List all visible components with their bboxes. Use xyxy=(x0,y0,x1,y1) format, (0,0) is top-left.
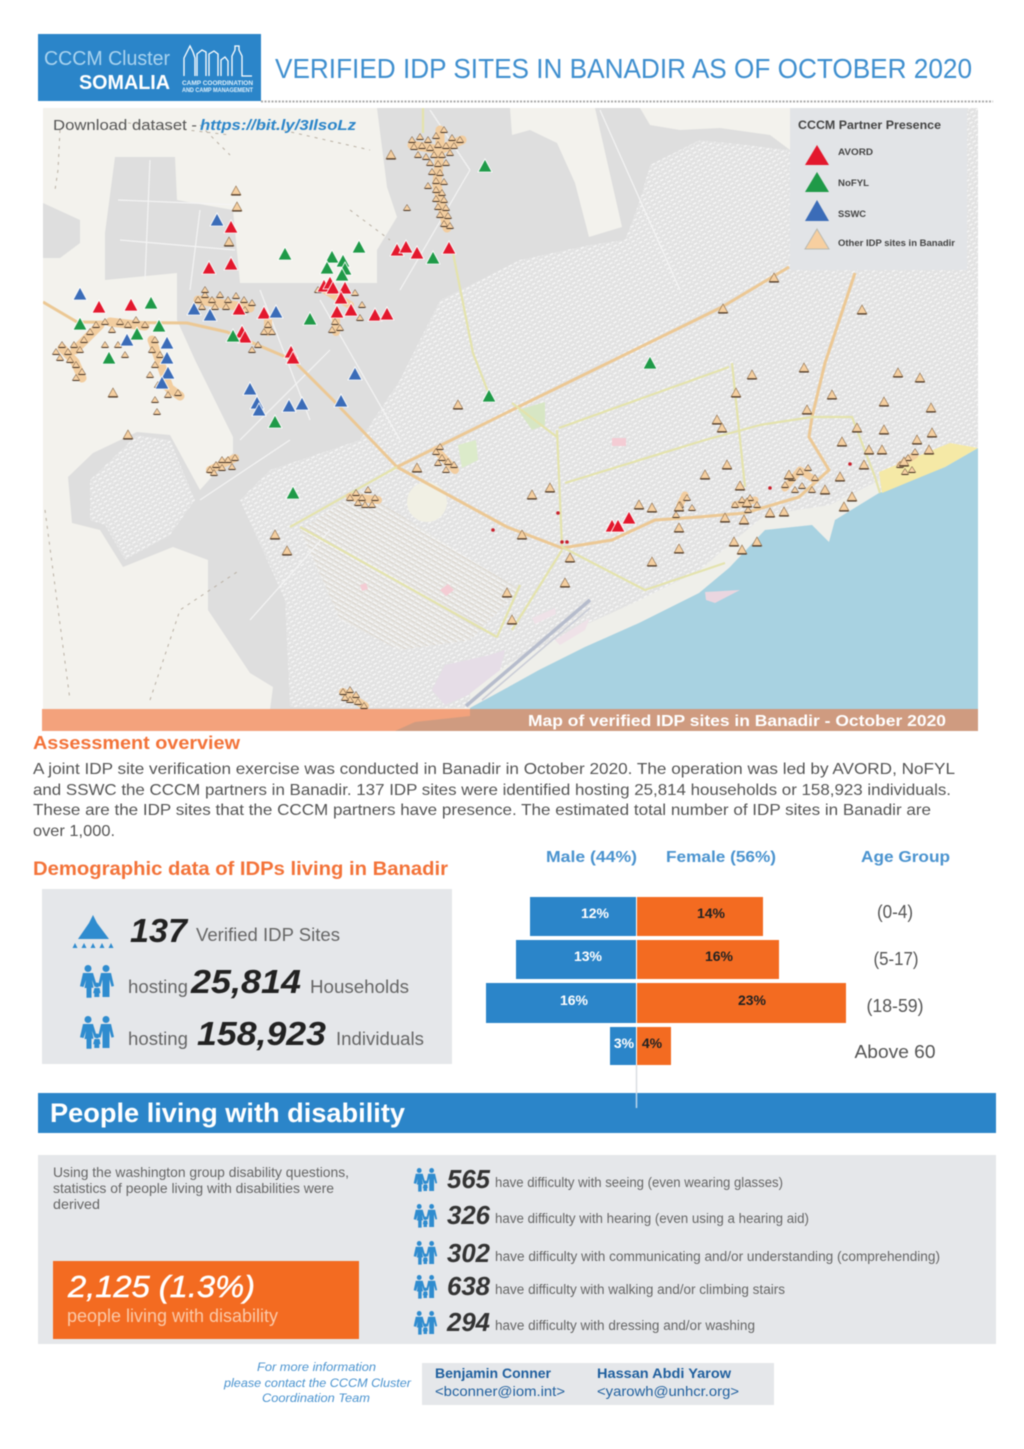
map caption bar: Map of verified IDP sites in Banadir - October 2020 xyxy=(528,713,946,730)
roads xyxy=(43,108,880,637)
intro text xyxy=(53,1164,349,1212)
map legend: CCCM partner presence: SSWC xyxy=(838,209,867,219)
contacts panel: Benjamin Conner xyxy=(435,1365,552,1381)
panel: key figures: hosting xyxy=(128,977,188,997)
footer note: please contact the CCCM Cluster xyxy=(223,1376,412,1390)
panel: key figures: Households xyxy=(310,977,409,997)
population pyramid chart: 16% xyxy=(705,948,734,964)
row: dressing: have difficulty with dressing and/or washing xyxy=(495,1318,755,1333)
row: seeing: have difficulty with seeing (even wearing glasses) xyxy=(495,1175,783,1190)
banner: people living with disability xyxy=(38,1093,996,1133)
map of verified IDP sites xyxy=(43,108,980,712)
map legend: CCCM partner presence: NoFYL xyxy=(838,178,870,188)
download dataset link: Download dataset - xyxy=(53,117,197,134)
population pyramid chart xyxy=(486,849,950,1108)
population pyramid chart: Male (44%) xyxy=(546,849,637,866)
row: seeing xyxy=(414,1164,783,1194)
population pyramid chart: Female (56%) xyxy=(666,849,776,866)
map caption bar xyxy=(42,709,978,731)
callout: total people with disability xyxy=(53,1261,359,1339)
population pyramid chart: (0-4) xyxy=(877,902,913,922)
footer note: Coordination Team xyxy=(262,1391,370,1405)
header logo: CCCM Cluster Somalia: CAMP COORDINATION xyxy=(182,81,253,87)
assessment overview paragraph: These are the IDP sites that the CCCM partners have presence. The estimated total number of IDP sites in Banadir are xyxy=(33,802,931,819)
population pyramid chart: Above 60 xyxy=(854,1042,936,1062)
row: communicating xyxy=(414,1238,940,1268)
contacts panel: <yarowh@unhcr.org> xyxy=(597,1383,739,1399)
icon: tent xyxy=(72,915,114,948)
row: walking xyxy=(414,1271,785,1301)
heading: demographic data: Demographic data of IDPs living in Banadir xyxy=(33,859,449,880)
header logo: CCCM Cluster Somalia: AND CAMP MANAGEMENT xyxy=(182,88,253,94)
download dataset link xyxy=(53,117,357,134)
callout: total people with disability: people living with disability xyxy=(67,1306,278,1326)
population pyramid chart: (5-17) xyxy=(874,949,918,969)
panel: disability statistics xyxy=(38,1155,996,1344)
heading: assessment overview: Assessment overview xyxy=(33,732,241,753)
panel: key figures: Individuals xyxy=(336,1029,424,1049)
intro text: Using the washington group disability questions, xyxy=(53,1164,349,1180)
row: hearing: have difficulty with hearing (even using a hearing aid) xyxy=(495,1211,809,1226)
title: VERIFIED IDP SITES IN BANADIR AS OF OCTOBER 2020 xyxy=(275,53,972,84)
icon: family xyxy=(80,1016,114,1049)
panel: key figures: 158,923 xyxy=(197,1015,326,1052)
row: communicating: have difficulty with communicating and/or understanding (comprehending) xyxy=(495,1249,940,1264)
population pyramid chart: 3% xyxy=(614,1035,635,1051)
map legend: CCCM partner presence: CCCM Partner Presence xyxy=(798,120,941,132)
population pyramid chart: Age Group xyxy=(861,849,950,866)
contacts panel xyxy=(422,1363,774,1405)
population pyramid chart: 12% xyxy=(581,905,610,921)
row: dressing xyxy=(414,1307,755,1337)
icon: family xyxy=(80,965,114,998)
callout: total people with disability: 2,125 (1.3%) xyxy=(67,1269,255,1304)
row: seeing: 565 xyxy=(447,1164,491,1194)
population pyramid chart: (18-59) xyxy=(866,996,924,1016)
map legend: CCCM partner presence xyxy=(790,108,967,270)
assessment overview paragraph xyxy=(33,761,955,840)
header logo: CCCM Cluster Somalia xyxy=(38,34,261,101)
row: walking: 638 xyxy=(447,1271,491,1301)
panel: key figures xyxy=(42,889,452,1064)
intro text: derived xyxy=(53,1196,100,1212)
population pyramid chart: 4% xyxy=(642,1035,663,1051)
map legend: CCCM partner presence: Other IDP sites in Banadir xyxy=(838,238,956,248)
population pyramid chart: 23% xyxy=(738,992,767,1008)
coastal strip xyxy=(470,480,880,708)
SSWC markers xyxy=(73,213,362,416)
IDP site clusters xyxy=(52,126,919,709)
header logo: CCCM Cluster Somalia: SOMALIA xyxy=(79,72,170,94)
map legend: CCCM partner presence: AVORD xyxy=(838,147,874,157)
row: hearing: 326 xyxy=(447,1200,491,1230)
population pyramid chart: 14% xyxy=(697,905,726,921)
panel: key figures: hosting xyxy=(128,1029,188,1049)
assessment overview paragraph: over 1,000. xyxy=(33,823,115,840)
assessment overview paragraph: A joint IDP site verification exercise was conducted in Banadir in October 2020. The operation was led by AVORD, NoFYL xyxy=(33,761,955,778)
contacts panel: Hassan Abdi Yarow xyxy=(597,1365,731,1381)
row: communicating: 302 xyxy=(447,1238,491,1268)
intro text: statistics of people living with disabilities were xyxy=(53,1180,334,1196)
banner: people living with disability: People living with disability xyxy=(50,1098,405,1128)
panel: key figures: 25,814 xyxy=(190,963,301,1000)
population pyramid chart: 13% xyxy=(574,948,603,964)
row: walking: have difficulty with walking and/or climbing stairs xyxy=(495,1282,785,1297)
contacts panel: <bconner@iom.int> xyxy=(435,1383,565,1399)
NoFYL markers xyxy=(73,159,657,499)
panel: key figures: 137 xyxy=(130,912,189,949)
row: dressing: 294 xyxy=(446,1307,491,1337)
download dataset link: https://bit.ly/3IlsoLz xyxy=(200,117,357,134)
footer note xyxy=(223,1360,412,1405)
AVORD markers xyxy=(92,220,636,532)
assessment overview paragraph: and SSWC the CCCM partners in Banadir. 137 IDP sites were identified hosting 25,814 households or 158,923 individuals. xyxy=(33,782,951,799)
other IDP site markers xyxy=(108,150,937,625)
ocean xyxy=(470,448,980,712)
population pyramid chart: 16% xyxy=(560,992,589,1008)
panel: key figures: Verified IDP Sites xyxy=(196,925,340,945)
header logo: CCCM Cluster Somalia: CCCM Cluster xyxy=(44,48,170,70)
footer note: For more information xyxy=(257,1360,376,1374)
row: hearing xyxy=(414,1200,809,1230)
